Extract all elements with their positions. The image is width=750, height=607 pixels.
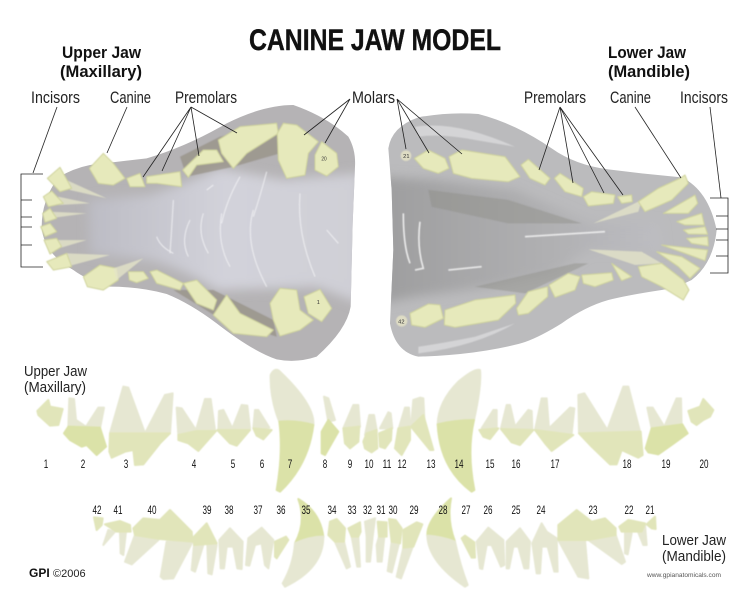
incisors — [663, 195, 698, 213]
tooth numbers: upper row: 15 — [486, 459, 494, 471]
row heading: lower jaw: (Mandible) — [662, 548, 726, 565]
credit: ©2006 — [53, 568, 86, 580]
heading: lower jaw — [608, 44, 690, 81]
premolars and molars lower row — [582, 273, 613, 287]
tooth numbers: upper row: 2 — [81, 459, 85, 471]
website: www.gpianatomicals.com — [646, 573, 721, 579]
tooth numbers: lower row: 25 — [512, 505, 520, 517]
tooth numbers: upper row: 11 — [382, 459, 392, 471]
heading: lower jaw: Lower Jaw — [608, 44, 686, 62]
tooth numbers: lower row: 39 — [202, 505, 212, 517]
tooth numbers: upper row: 8 — [323, 459, 327, 471]
heading: upper jaw — [60, 44, 142, 81]
tooth numbers: lower row: 38 — [224, 505, 234, 517]
photo: lower jaw model: 21 — [403, 154, 409, 160]
tooth numbers: upper row: 5 — [231, 459, 235, 471]
labels and leader lines: lower jaw: Premolars — [524, 89, 586, 107]
tooth numbers: lower row — [92, 505, 654, 517]
small numbered tags — [401, 150, 411, 161]
canines — [89, 153, 125, 185]
tooth numbers: lower row: 29 — [410, 505, 418, 517]
heading: upper jaw: (Maxillary) — [60, 63, 142, 81]
tooth numbers: upper row: 7 — [288, 459, 292, 471]
tooth numbers: lower row: 34 — [328, 505, 337, 517]
canines — [593, 200, 642, 223]
heading: upper jaw: Upper Jaw — [62, 44, 141, 62]
lower tooth row, teeth 42 to 32 — [94, 499, 375, 587]
labels and leader lines: upper jaw: Incisors — [31, 89, 80, 107]
lower tooth row, teeth 31 to 21 — [377, 498, 656, 587]
credit: GPI — [29, 566, 50, 580]
tooth numbers: lower row: 30 — [388, 505, 398, 517]
tooth numbers: upper row: 20 — [700, 459, 708, 471]
title: CANINE JAW MODEL — [249, 24, 501, 57]
tooth numbers: upper row — [44, 459, 708, 471]
tooth numbers: lower row: 26 — [484, 505, 492, 517]
tooth numbers: lower row: 27 — [462, 505, 470, 517]
incisors — [41, 123, 338, 337]
row heading: upper jaw — [24, 363, 87, 396]
tooth numbers: upper row: 9 — [348, 459, 352, 471]
upper tooth row, teeth 1 to 10 — [37, 370, 377, 492]
tooth numbers: lower row: 41 — [114, 505, 122, 517]
row heading: lower jaw — [662, 532, 726, 565]
tooth numbers: lower row: 21 — [646, 505, 654, 517]
heading: lower jaw: (Mandible) — [608, 63, 690, 81]
tooth numbers: upper row: 10 — [364, 459, 374, 471]
labels and leader lines: lower jaw: Canine — [610, 89, 651, 107]
tooth numbers: lower row: 40 — [148, 505, 156, 517]
row heading: lower jaw: Lower Jaw — [662, 532, 726, 549]
tooth numbers: upper row: 18 — [622, 459, 632, 471]
photo: upper jaw model — [41, 105, 360, 361]
labels and leader lines: upper jaw — [21, 89, 395, 267]
tooth numbers: lower row: 23 — [588, 505, 598, 517]
tooth numbers: upper row: 1 — [44, 459, 48, 471]
photo: upper jaw model: 1 — [317, 300, 320, 306]
tooth numbers: upper row: 12 — [398, 459, 406, 471]
tooth numbers: lower row: 32 — [363, 505, 372, 517]
tooth numbers: lower row: 22 — [624, 505, 634, 517]
tooth numbers: upper row: 6 — [260, 459, 264, 471]
molars upper row — [277, 123, 318, 178]
palate ridges — [157, 172, 338, 287]
tooth numbers: upper row: 4 — [192, 459, 197, 471]
tooth numbers: lower row: 35 — [302, 505, 310, 517]
premolars and molars upper row — [410, 150, 708, 327]
tooth numbers: upper row: 16 — [512, 459, 520, 471]
upper tooth row, teeth 11 to 20 — [379, 370, 713, 492]
credit — [29, 566, 86, 580]
labels and leader lines: upper jaw: Canine — [110, 89, 151, 107]
premolars upper row — [127, 173, 145, 187]
labels and leader lines: upper jaw: Molars — [352, 89, 395, 107]
labels and leader lines: lower jaw — [397, 89, 728, 273]
tooth numbers: upper row: 19 — [662, 459, 670, 471]
shadows near the gum — [173, 123, 280, 337]
tooth numbers: lower row: 33 — [348, 505, 356, 517]
photo: upper jaw model: 20 — [321, 157, 327, 163]
row heading: upper jaw: Upper Jaw — [24, 363, 87, 380]
premolars lower row — [128, 272, 148, 283]
tooth numbers: lower row: 37 — [254, 505, 262, 517]
photo: lower jaw model — [382, 113, 717, 357]
tooth numbers: lower row: 24 — [536, 505, 546, 517]
tooth numbers: upper row: 14 — [454, 459, 464, 471]
tooth numbers: lower row: 28 — [438, 505, 448, 517]
tooth numbers: lower row: 31 — [376, 505, 386, 517]
shadows and gloss — [428, 190, 588, 293]
row heading: upper jaw: (Maxillary) — [24, 379, 86, 396]
tooth numbers: upper row: 17 — [550, 459, 560, 471]
photo: lower jaw model: 42 — [398, 319, 404, 325]
tooth numbers: lower row: 36 — [276, 505, 286, 517]
labels and leader lines: upper jaw: Premolars — [175, 89, 237, 107]
tooth numbers: lower row: 42 — [92, 505, 102, 517]
labels and leader lines: lower jaw: Incisors — [680, 89, 728, 107]
molars lower row — [270, 288, 313, 336]
tooth numbers: upper row: 3 — [124, 459, 128, 471]
tooth numbers: upper row: 13 — [426, 459, 436, 471]
